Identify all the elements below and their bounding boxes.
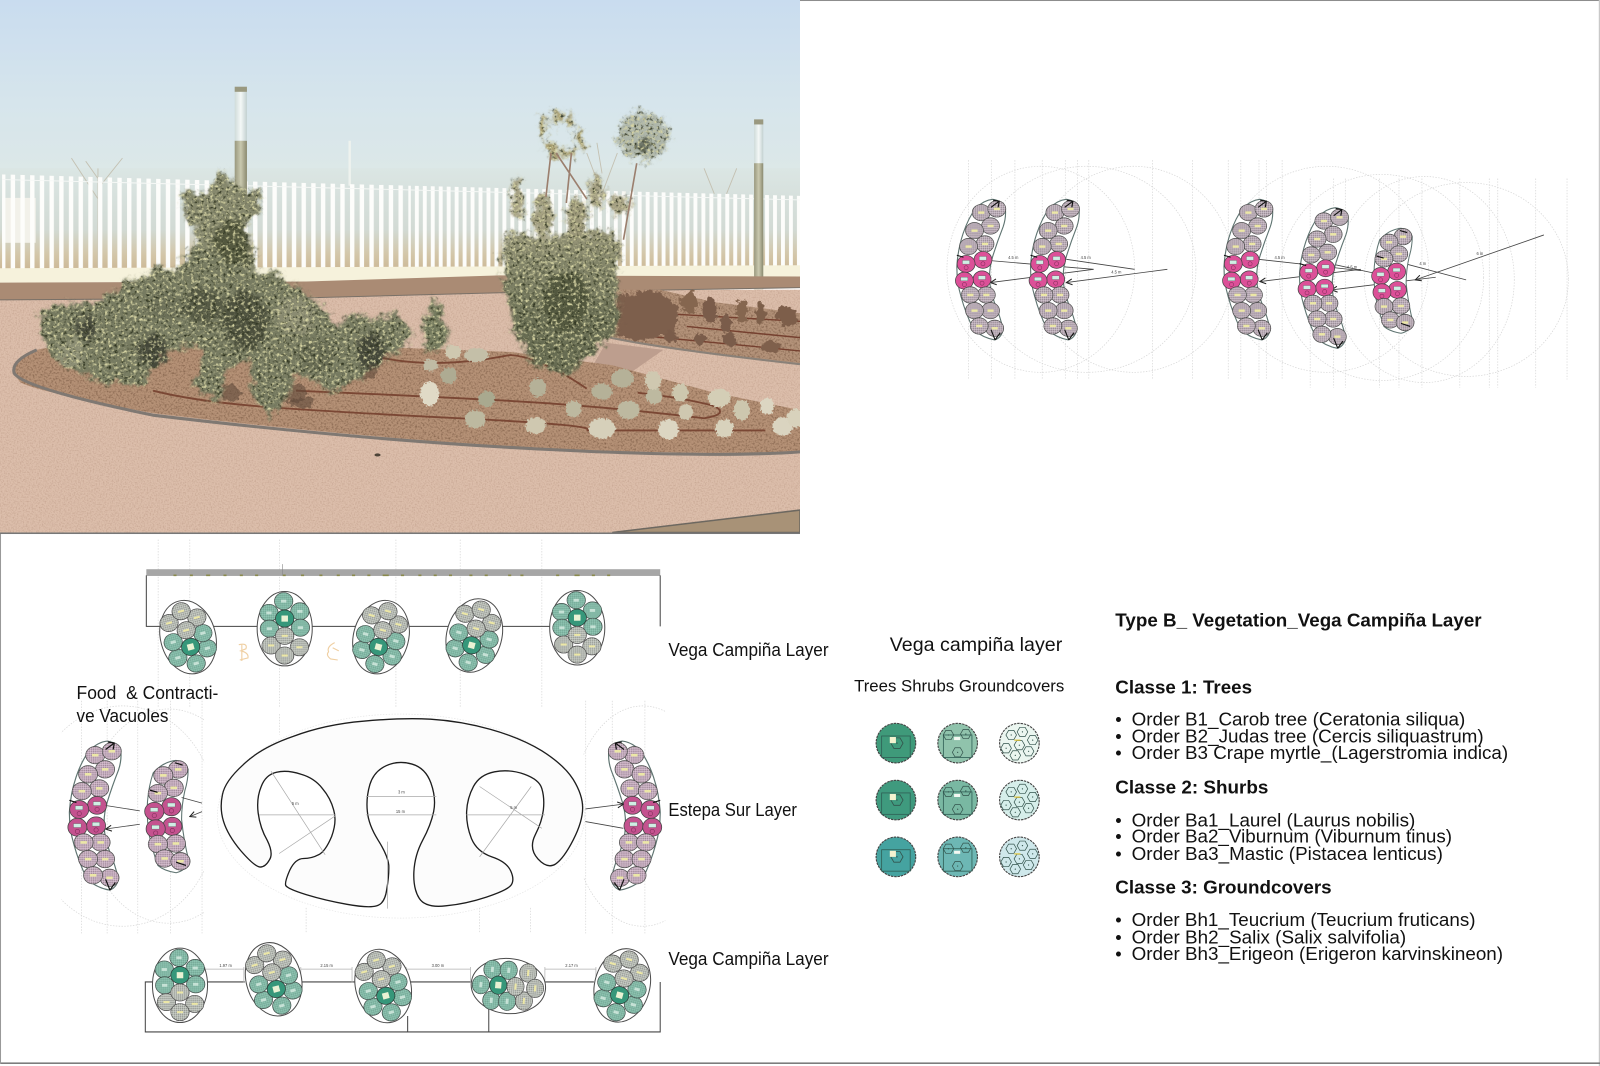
class 1 list: Order B3 Crape myrtle_(Lagerstromia indica) [1132, 742, 1508, 764]
right bed drip lines [654, 314, 800, 352]
legend symbols [882, 727, 1038, 874]
tall tree right main canopy [500, 175, 634, 376]
white picket fence left part [0, 168, 408, 270]
central organic island: 3 m [398, 790, 405, 795]
class 3 list: • [1115, 943, 1122, 964]
right band [608, 741, 662, 890]
radius lines and arrows [991, 235, 1544, 290]
diagram: site plan [29, 540, 829, 1032]
white picket fence right part [408, 186, 800, 267]
shrub cluster left [40, 247, 416, 418]
dimension labels: 4.5 m [1008, 255, 1019, 260]
left outer band [68, 741, 121, 890]
bottom row structure: 1.97 m [219, 963, 232, 968]
bottom row structure [145, 963, 660, 1032]
fence rail [2, 180, 800, 200]
class 3 list: • [1115, 927, 1122, 948]
dimension labels: 6 m [1477, 251, 1484, 256]
class 1 list: • [1115, 708, 1122, 729]
class 2 list: • [1115, 809, 1122, 830]
heading: Type B_ Vegetation_Vega Campiña Layer [1115, 609, 1482, 630]
class 1 list [1115, 708, 1508, 764]
lower right curb and soil [612, 510, 800, 532]
callout: food and contractile vacuoles [77, 682, 218, 726]
central organic island [221, 719, 583, 909]
far planting strip [0, 275, 800, 300]
layer label: top: Vega Campiña Layer [668, 639, 829, 660]
drip irrigation lines [153, 355, 765, 430]
small orange outlines [239, 643, 339, 661]
class 3 list: Order Bh1_Teucrium (Teucrium fruticans) [1132, 909, 1476, 931]
main planting bed soil [14, 337, 800, 453]
class 1 list: Order B2_Judas tree (Cercis siliquastrum) [1132, 726, 1484, 748]
callout: food and contractile vacuoles: ve Vacuoles [77, 705, 168, 726]
left inner band [145, 760, 190, 873]
class 3 list: Order Bh3_Erigeon (Erigeron karvinskineon) [1132, 943, 1503, 965]
bottom row planting ovals [152, 936, 658, 1029]
small distant lamp [348, 141, 351, 186]
bottom row structure: 2.15 m [320, 963, 333, 968]
dimension labels: 4.5 m [1081, 255, 1091, 260]
dimension labels: 4.5 m [1274, 255, 1285, 260]
bottom edge of photo [0, 532, 800, 534]
right bed curb [610, 338, 800, 364]
class 3 list: • [1115, 909, 1122, 930]
small shrub [421, 294, 451, 353]
far strip curb [0, 288, 800, 300]
callout: food and contractile vacuoles: Food & Contracti- [77, 682, 218, 703]
layer label: middle: Estepa Sur Layer [668, 799, 797, 820]
upper shrub tree [180, 170, 260, 273]
photo: planted bed with fence and path [0, 0, 805, 532]
bottom row structure: 3.00 m [432, 963, 445, 968]
main bed curb [14, 350, 800, 454]
top row planting ovals [152, 591, 605, 680]
class 3 list: Order Bh2_Salix (Salix salvifolia) [1132, 927, 1406, 949]
class 1 list: • [1115, 726, 1122, 747]
construction grid [947, 160, 1568, 388]
wall base [0, 265, 800, 283]
right planting bed [610, 290, 800, 363]
band 1 [955, 199, 1006, 340]
class 2 heading: Classe 2: Shurbs [1115, 777, 1268, 798]
band 2 [1029, 199, 1079, 340]
dimension labels: 4.5 m [1111, 269, 1122, 274]
band 3 [1223, 199, 1273, 340]
path ground [0, 290, 800, 532]
bare trees behind fence [71, 143, 737, 267]
panel: vegetation species list [1115, 609, 1508, 965]
class 3 list [1115, 909, 1503, 965]
class 1 list: Order B1_Carob tree (Ceratonia siliqua) [1132, 708, 1465, 730]
tree branches [546, 153, 637, 240]
groundcover plants [420, 345, 805, 440]
central organic island: 5 m [292, 801, 299, 806]
dimension labels: 4.5 m [1347, 264, 1358, 269]
lamp post left [235, 87, 247, 204]
tree top sprigs [539, 107, 586, 158]
class 2 list [1115, 809, 1452, 865]
class 1 list: • [1115, 742, 1122, 763]
legend columns: Trees Shrubs Groundcovers [854, 678, 1064, 696]
bottom row structure: 2.17 m [565, 963, 578, 968]
band 4 [1298, 208, 1348, 348]
panel: species legend [854, 634, 1064, 877]
class 2 list: Order Ba3_Mastic (Pistacea lenticus) [1132, 843, 1443, 865]
diagram: concentric planting bands plan [947, 160, 1568, 388]
class 2 list: • [1115, 826, 1122, 847]
class 2 list: • [1115, 843, 1122, 864]
dimension labels [1008, 251, 1484, 274]
band arrows [106, 798, 623, 829]
band 5 [1372, 228, 1414, 333]
sky [0, 0, 800, 168]
legend title: Vega campiña layer [890, 634, 1063, 656]
layer label: bottom: Vega Campiña Layer [668, 948, 829, 969]
shadow on path [594, 342, 662, 371]
right bed shadow mass and shrubs [616, 290, 797, 353]
lamp post right [754, 119, 763, 290]
ground shadows under shrubs [220, 364, 380, 409]
dimension labels: 4 m [1419, 261, 1427, 266]
tree top round crown [616, 111, 669, 162]
specks on path [374, 453, 381, 456]
class 3 heading: Classe 3: Groundcovers [1115, 877, 1332, 898]
class 2 list: Order Ba2_Viburnum (Viburnum tinus) [1132, 826, 1452, 848]
background behind fence [0, 188, 800, 268]
legend swatch grid [876, 723, 1039, 877]
central organic island: 5 m [510, 805, 518, 810]
faint construction lines [61, 540, 666, 934]
class 1 heading: Classe 1: Trees [1115, 677, 1252, 698]
top wall strip [146, 564, 660, 626]
central organic island: 15 m [396, 809, 406, 814]
distant building [2, 198, 36, 243]
class 2 list: Order Ba1_Laurel (Laurus nobilis) [1132, 809, 1415, 831]
